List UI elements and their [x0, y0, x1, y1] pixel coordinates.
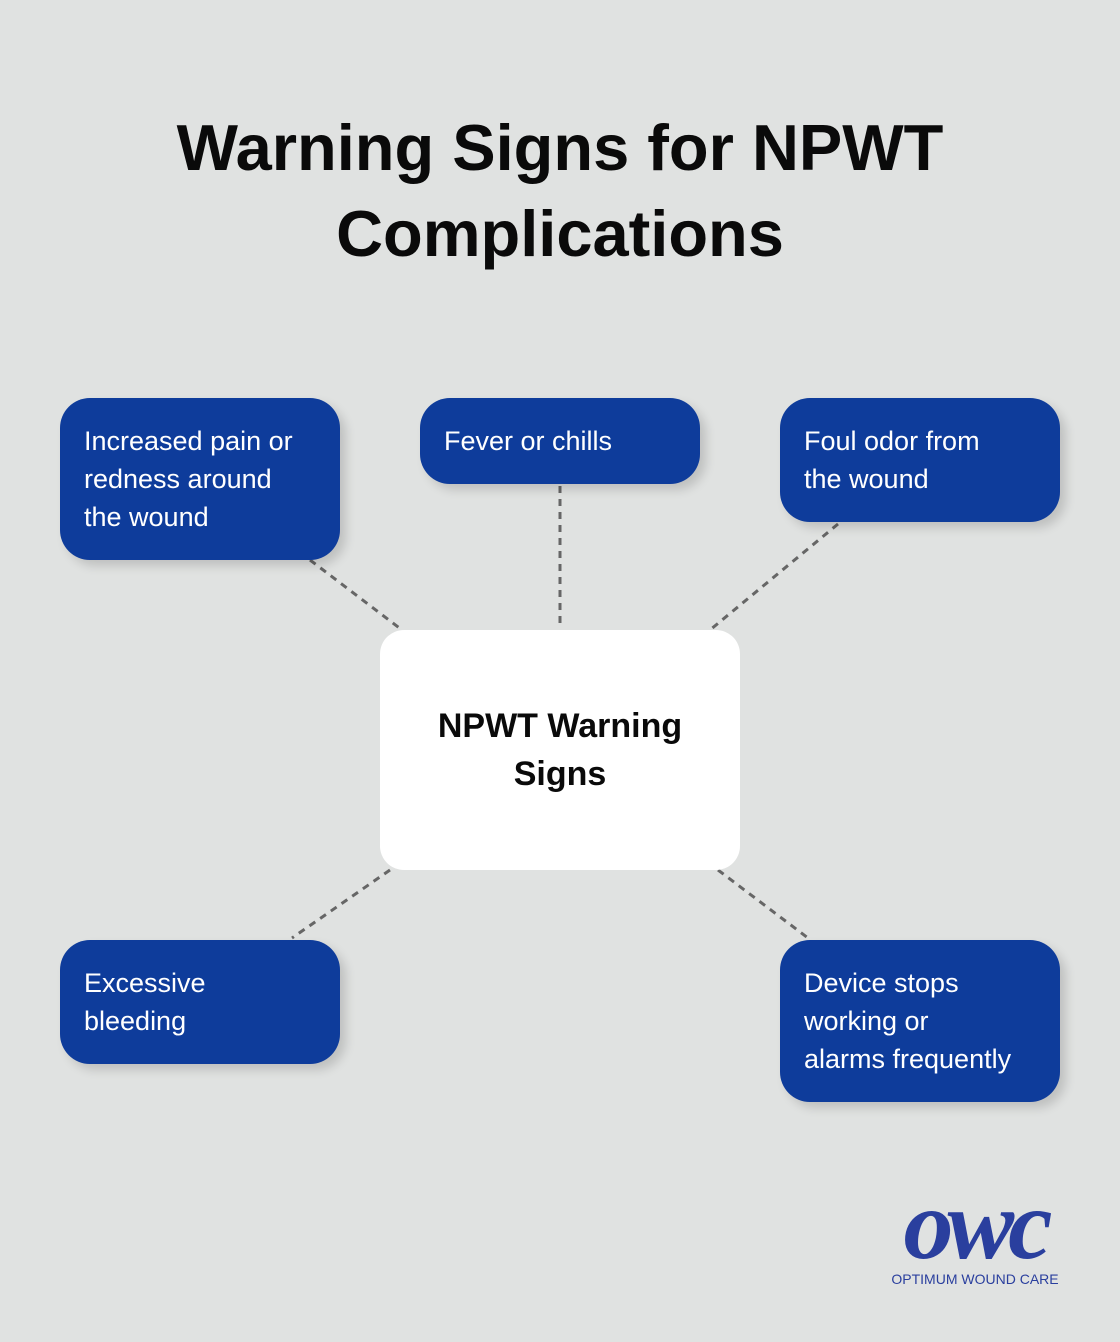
- title: Complications: [336, 197, 784, 270]
- box: bleeding: bleeding: [84, 1006, 186, 1036]
- box: odor: [780, 398, 1060, 522]
- box: odor: the wound: [804, 464, 929, 494]
- box: pain: redness around: [84, 464, 272, 494]
- box: device: [780, 940, 1060, 1102]
- box: pain: the wound: [84, 502, 209, 532]
- title: [176, 111, 943, 270]
- box: device: Device stops: [804, 968, 959, 998]
- title: Warning Signs for NPWT: [177, 111, 943, 184]
- logo: OPTIMUM WOUND CARE: [891, 1271, 1059, 1287]
- box: fever: [420, 398, 700, 484]
- box: bleeding: [60, 940, 340, 1064]
- box: device: working or: [804, 1006, 929, 1036]
- box: device: alarms frequently: [804, 1044, 1011, 1074]
- logo: owc: [903, 1169, 1047, 1280]
- center box: NPWT Warning: [438, 707, 682, 745]
- box: pain: [60, 398, 340, 560]
- box: fever: Fever or chills: [444, 426, 612, 456]
- box: pain: Increased pain or: [84, 426, 293, 456]
- box: odor: Foul odor from: [804, 426, 980, 456]
- box: bleeding: Excessive: [84, 968, 206, 998]
- center box: [380, 630, 740, 870]
- center box: Signs: [514, 755, 606, 793]
